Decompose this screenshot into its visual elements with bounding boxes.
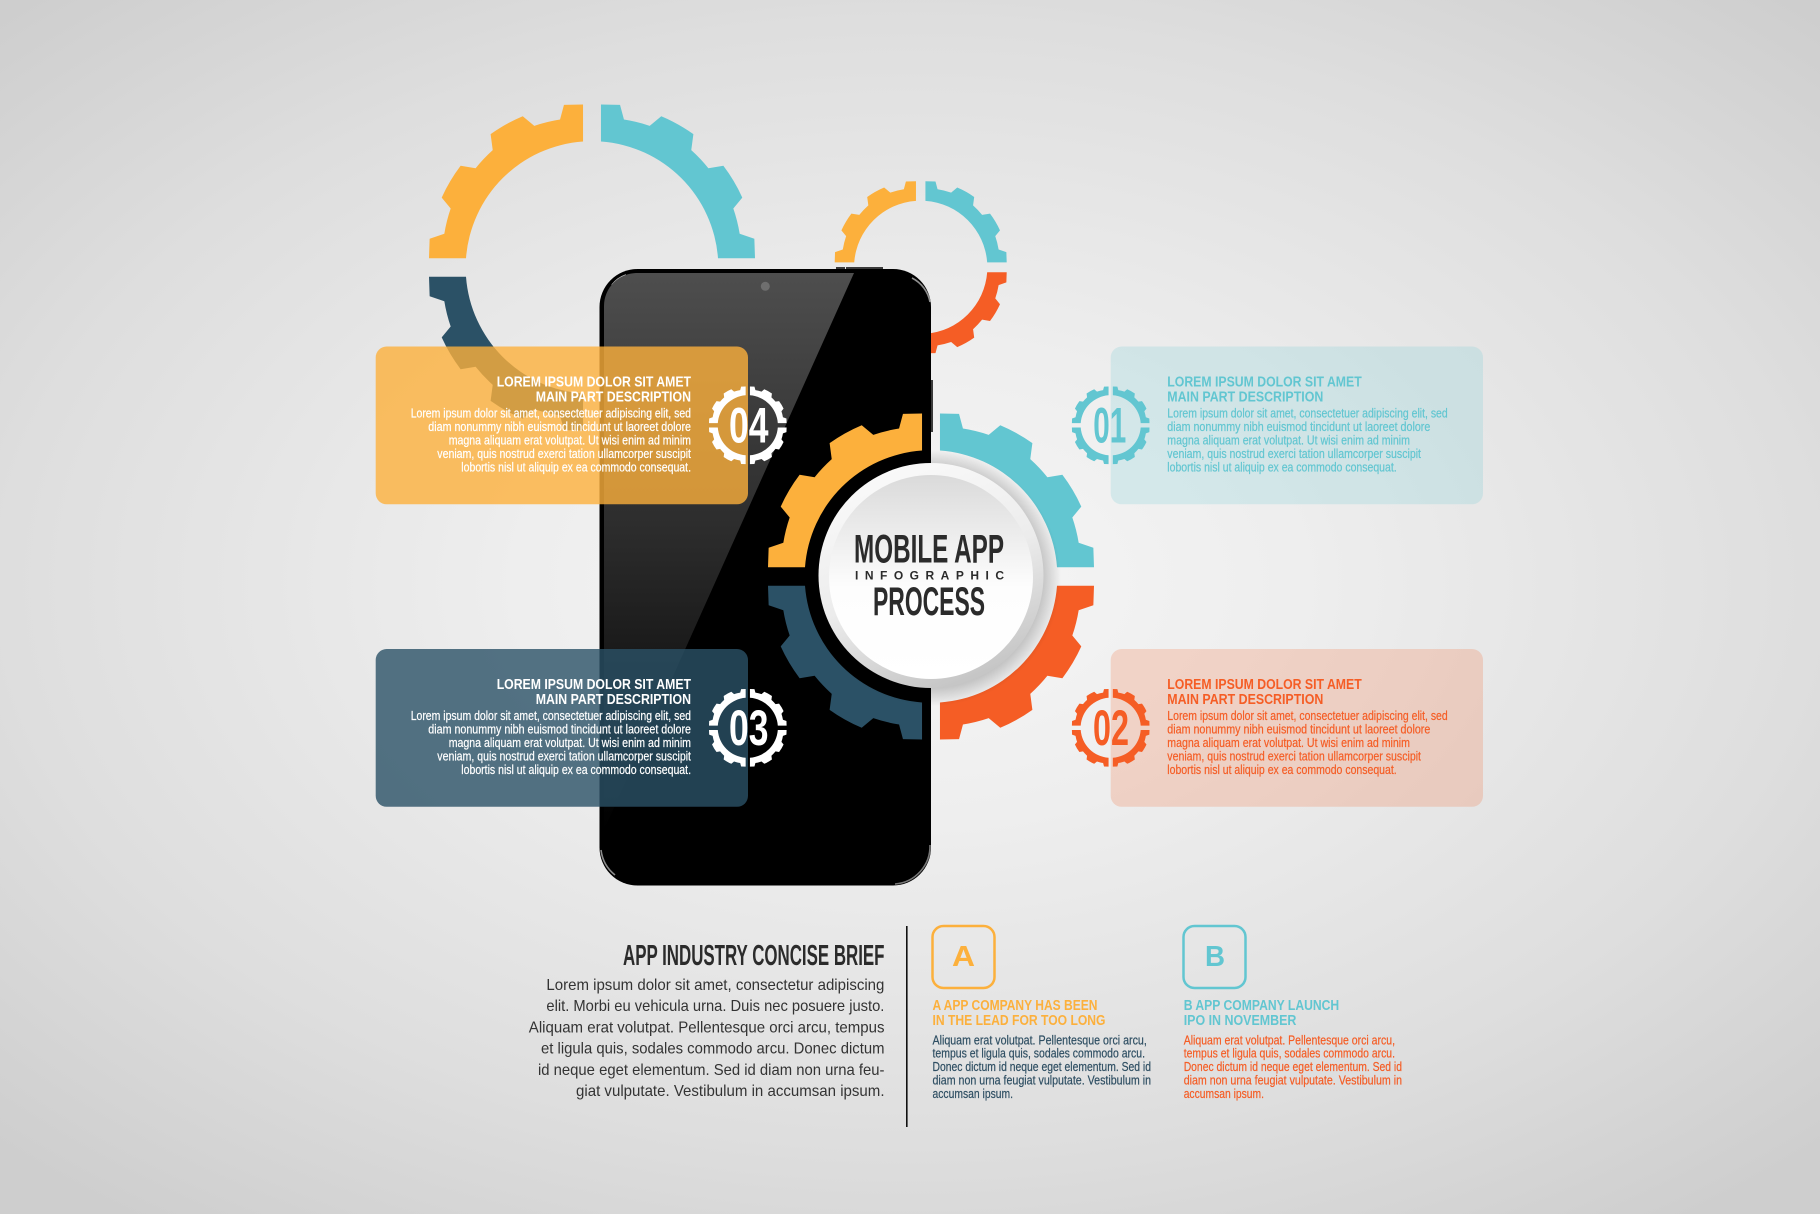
small gear, top right [835, 181, 1007, 353]
badge 02 [1072, 689, 1150, 767]
column B body: tempus et ligula quis, sodales commodo arcu. [1184, 1047, 1395, 1061]
panel 02 text [1167, 677, 1448, 777]
screen glare [604, 273, 854, 649]
large gear, top left [429, 104, 755, 430]
column A heading [932, 998, 1106, 1029]
panel 03 text: LOREM IPSUM DOLOR SIT AMET [497, 677, 691, 693]
badge 03: 03 [729, 700, 768, 756]
brief body text: giat vulputate. Vestibulum in accumsan ipsum. [576, 1083, 884, 1100]
column B body: accumsan ipsum. [1184, 1087, 1264, 1101]
column A body: Donec dictum id neque eget elementum. Sed id [932, 1060, 1151, 1074]
panel 04 text: LOREM IPSUM DOLOR SIT AMET [497, 375, 691, 391]
column B heading: B APP COMPANY LAUNCH [1184, 998, 1339, 1014]
panel 01 text: magna aliquam erat volutpat. Ut wisi enim ad minim [1167, 434, 1410, 448]
column B heading: IPO IN NOVEMBER [1184, 1013, 1297, 1029]
column B body: diam non urna feugiat vulputate. Vestibulum in [1184, 1073, 1402, 1087]
title text: PROCESS [873, 580, 985, 624]
title text: MOBILE APP [854, 528, 1004, 572]
panel 04 text: MAIN PART DESCRIPTION [536, 390, 691, 406]
icon: A box: A [952, 941, 975, 973]
panel 01 text: veniam, quis nostrud exerci tation ullamcorper suscipit [1167, 447, 1421, 461]
brief body text: id neque eget elementum. Sed id diam non urna feu- [538, 1062, 884, 1079]
column B heading [1184, 998, 1339, 1029]
panel 04 orange [376, 346, 748, 504]
badge 01: 01 [1093, 398, 1126, 454]
panel 03 text: diam nonummy nibh euismod tincidunt ut laoreet dolore [428, 722, 691, 736]
column A body: Aliquam erat volutpat. Pellentesque orci arcu, [932, 1033, 1147, 1047]
title text: INFOGRAPHIC [855, 568, 1004, 582]
icon: B box [1184, 926, 1246, 988]
central title disc [805, 450, 1061, 706]
brief body text: et ligula quis, sodales commodo arcu. Donec dictum [541, 1041, 884, 1058]
panel 04 text: magna aliquam erat volutpat. Ut wisi enim ad minim [449, 434, 691, 448]
column A heading: IN THE LEAD FOR TOO LONG [932, 1013, 1106, 1029]
badge 03 [709, 689, 787, 767]
badge 02: 02 [1093, 700, 1129, 756]
badge 01 [1072, 386, 1150, 464]
column B body: Aliquam erat volutpat. Pellentesque orci arcu, [1184, 1033, 1395, 1047]
panel 03 text: Lorem ipsum dolor sit amet, consectetuer adipiscing elit, sed [411, 709, 691, 723]
brief body text [529, 977, 884, 1100]
panel 02 text: veniam, quis nostrud exerci tation ullamcorper suscipit [1167, 750, 1421, 764]
column B body: Donec dictum id neque eget elementum. Sed id [1184, 1060, 1402, 1074]
panel 01 text [1167, 375, 1448, 474]
badge 04: 04 [729, 398, 769, 454]
icon: A box [932, 926, 994, 988]
panel 02 text: magna aliquam erat volutpat. Ut wisi enim ad minim [1167, 736, 1410, 750]
brief body text: Aliquam erat volutpat. Pellentesque orci arcu, tempus [529, 1019, 884, 1036]
brief body text: Lorem ipsum dolor sit amet, consectetur adipiscing [546, 977, 884, 994]
panel 01 text: Lorem ipsum dolor sit amet, consectetuer adipiscing elit, sed [1167, 406, 1448, 420]
panel 01 text: lobortis nisl ut aliquip ex ea commodo consequat. [1167, 460, 1397, 474]
panel 04 text: veniam, quis nostrud exerci tation ullamcorper suscipit [437, 447, 691, 461]
vertical divider [906, 926, 908, 1127]
panel 01 teal [1111, 346, 1483, 504]
panel 02 red [1111, 649, 1483, 807]
column A body: accumsan ipsum. [932, 1087, 1013, 1101]
panel 04 text: lobortis nisl ut aliquip ex ea commodo consequat. [461, 460, 691, 474]
brief heading: APP INDUSTRY CONCISE BRIEF [623, 940, 884, 972]
column A body: tempus et ligula quis, sodales commodo arcu. [932, 1047, 1145, 1061]
panel 02 text: lobortis nisl ut aliquip ex ea commodo consequat. [1167, 763, 1397, 777]
panel 01 text: LOREM IPSUM DOLOR SIT AMET [1167, 375, 1362, 391]
panel 03 text: magna aliquam erat volutpat. Ut wisi enim ad minim [449, 736, 691, 750]
panel 04 text: diam nonummy nibh euismod tincidunt ut laoreet dolore [428, 420, 691, 434]
camera [761, 282, 770, 291]
title text [854, 528, 1004, 624]
smartphone [600, 267, 933, 886]
panel 03 text [411, 677, 691, 777]
panel 03 text: veniam, quis nostrud exerci tation ullamcorper suscipit [437, 750, 691, 764]
icon: B box: B [1205, 941, 1225, 973]
panel 02 text: LOREM IPSUM DOLOR SIT AMET [1167, 677, 1362, 693]
panel 03 text: MAIN PART DESCRIPTION [536, 692, 691, 708]
phone body [600, 269, 931, 886]
panel 01 text: diam nonummy nibh euismod tincidunt ut laoreet dolore [1167, 420, 1430, 434]
column B body [1184, 1033, 1402, 1101]
phone buttons [836, 267, 933, 432]
panel 03 text: lobortis nisl ut aliquip ex ea commodo consequat. [461, 763, 691, 777]
panel 04 text: Lorem ipsum dolor sit amet, consectetuer adipiscing elit, sed [411, 406, 691, 420]
brief body text: elit. Morbi eu vehicula urna. Duis nec posuere justo. [546, 998, 884, 1015]
column A body [932, 1033, 1151, 1101]
panel 04 text [411, 375, 691, 474]
column A heading: A APP COMPANY HAS BEEN [932, 998, 1098, 1014]
panel 02 text: MAIN PART DESCRIPTION [1167, 692, 1323, 708]
panel 03 navy [376, 649, 748, 807]
panel 01 text: MAIN PART DESCRIPTION [1167, 390, 1323, 406]
central gear [768, 414, 1094, 740]
panel 02 text: Lorem ipsum dolor sit amet, consectetuer adipiscing elit, sed [1167, 709, 1448, 723]
panel 02 text: diam nonummy nibh euismod tincidunt ut laoreet dolore [1167, 722, 1430, 736]
column A body: diam non urna feugiat vulputate. Vestibulum in [932, 1073, 1151, 1087]
badge 04 [709, 386, 787, 464]
